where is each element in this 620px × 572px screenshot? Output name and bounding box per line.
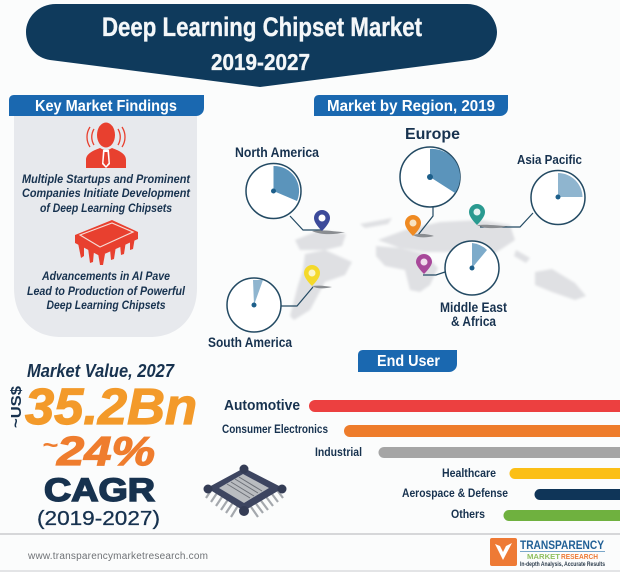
title text: 2019-2027 — [211, 49, 310, 75]
market value currency: ~US$ — [8, 385, 25, 428]
bar chart: end user — [222, 397, 620, 521]
region: europe: Europe — [405, 126, 460, 143]
text: finding one — [22, 174, 191, 215]
icon: microchip — [75, 220, 138, 265]
heading: key market findings: Key Market Findings — [35, 98, 177, 115]
bar: aerospace and defense: Aerospace & Defense — [402, 486, 508, 500]
heading: key market findings — [9, 95, 204, 116]
bar: automotive: Automotive — [224, 397, 300, 414]
heading: end user — [358, 350, 457, 372]
market value figure: 35.2Bn — [25, 378, 197, 435]
logo: transparency market research — [490, 538, 606, 568]
market value block: Market Value, 2027 — [27, 361, 175, 381]
text: finding one: of Deep Learning Chipsets — [40, 203, 172, 215]
bar: consumer electronics: Consumer Electronics — [222, 422, 328, 436]
text: finding two: Advancements in AI Pave — [41, 271, 171, 283]
cagr period: (2019-2027) — [37, 508, 160, 530]
text: finding one: Multiple Startups and Prominent — [22, 174, 191, 186]
region: south america — [208, 265, 332, 350]
region: north america — [235, 144, 345, 234]
logo: transparency market research: In-depth Analysis, Accurate Results — [520, 562, 606, 568]
icon: processor chip — [204, 464, 286, 517]
logo: transparency market research: MARKET — [527, 554, 561, 561]
market value block — [8, 361, 197, 530]
title banner — [26, 4, 497, 87]
bar: healthcare — [442, 466, 620, 480]
text: finding two: Deep Learning Chipsets — [46, 300, 166, 312]
title text: Deep Learning Chipset Market — [102, 12, 422, 42]
heading: market by region: Market by Region, 2019 — [327, 98, 495, 115]
bar: others: Others — [451, 507, 485, 521]
region: middle east and africa — [416, 241, 507, 329]
bar: healthcare: Healthcare — [442, 466, 496, 480]
title text — [102, 12, 422, 75]
footer — [0, 533, 620, 572]
text: finding two — [27, 271, 186, 312]
icon: speaking person — [86, 122, 126, 168]
region: asia pacific — [469, 152, 585, 228]
cagr figure: 24% — [56, 428, 155, 474]
logo: transparency market research: TRANSPARENCY — [520, 538, 604, 552]
logo: transparency market research: RESEARCH — [561, 554, 598, 561]
bar: consumer electronics — [222, 422, 620, 437]
cagr figure: ~ — [42, 432, 58, 459]
text: finding two: Lead to Production of Powerful — [27, 286, 186, 298]
bar: aerospace and defense — [402, 486, 620, 500]
region: middle east and africa: & Africa — [451, 314, 496, 329]
heading: end user: End User — [377, 353, 440, 370]
text: finding one: Companies Initiate Development — [22, 188, 191, 200]
region: south america: South America — [208, 334, 292, 350]
region: asia pacific: Asia Pacific — [517, 152, 582, 167]
bar: industrial: Industrial — [315, 445, 362, 459]
region: middle east and africa: Middle East — [440, 300, 507, 315]
region: north america: North America — [235, 144, 319, 160]
website address: www.transparencymarketresearch.com — [27, 551, 208, 562]
region: europe — [400, 126, 460, 237]
cagr label: CAGR — [44, 472, 155, 508]
bar: automotive — [224, 397, 620, 414]
panel: key market findings — [9, 95, 204, 337]
bar: industrial — [315, 445, 620, 459]
bar: others — [451, 507, 620, 521]
world map — [290, 218, 586, 320]
